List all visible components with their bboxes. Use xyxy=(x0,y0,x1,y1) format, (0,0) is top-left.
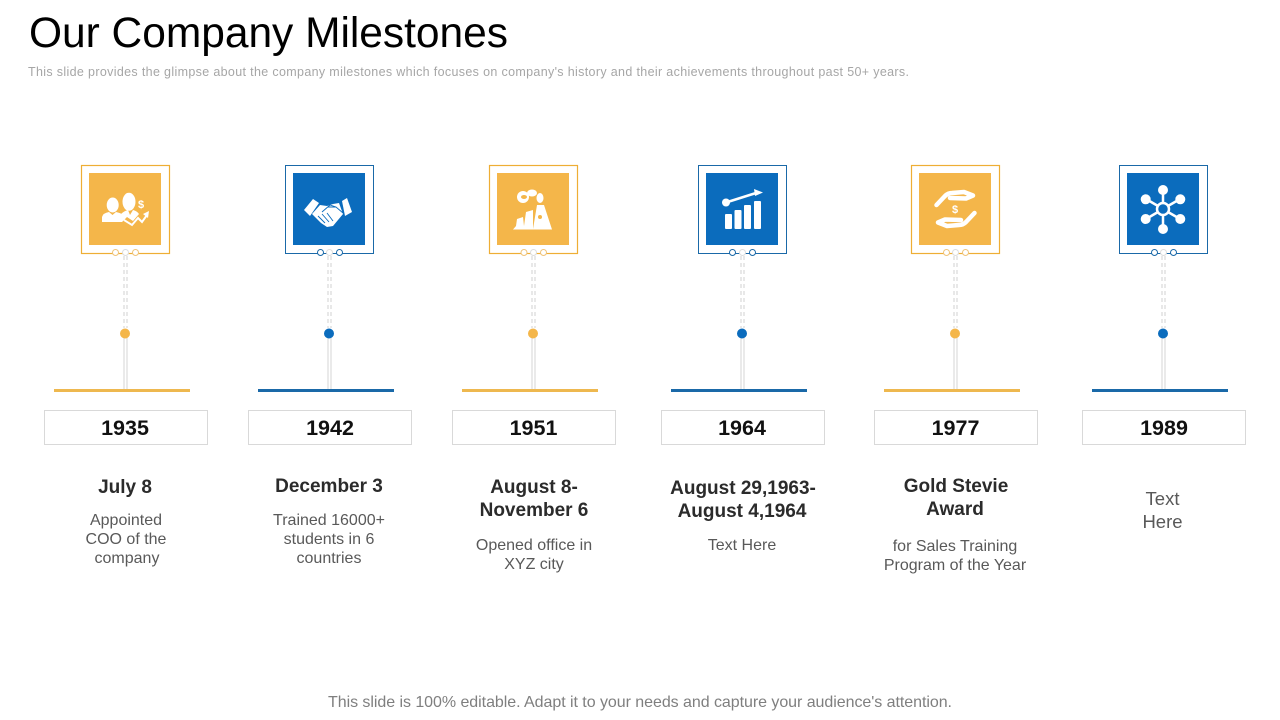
milestone 1942 xyxy=(248,166,412,567)
connector xyxy=(112,250,138,390)
description: Award xyxy=(926,499,984,520)
description: COO of the xyxy=(86,531,167,548)
base bar xyxy=(671,389,807,392)
icon box: network hub xyxy=(1120,166,1208,254)
base bar xyxy=(54,389,190,392)
milestone 1951 xyxy=(452,166,616,573)
milestone 1935 xyxy=(44,166,208,567)
year box: 1989 xyxy=(1140,416,1188,440)
description: August 4,1964 xyxy=(678,501,807,522)
year box xyxy=(452,410,616,444)
description xyxy=(884,476,1027,574)
connector xyxy=(1152,250,1176,390)
icon box: hands and dollar xyxy=(912,166,1000,254)
footer note: This slide is 100% editable. Adapt it to your needs and capture your audience's attention. xyxy=(328,694,952,711)
icon box: people and growth xyxy=(82,166,170,254)
connector xyxy=(730,250,756,390)
description: December 3 xyxy=(275,476,383,497)
base bar xyxy=(462,389,598,392)
milestone 1964 xyxy=(662,166,824,554)
description: July 8 xyxy=(98,477,152,498)
year box: 1964 xyxy=(718,416,766,440)
year box: 1935 xyxy=(101,416,149,440)
description: countries xyxy=(297,550,361,567)
title: Our Company Milestones xyxy=(29,10,508,57)
year box: 1977 xyxy=(932,416,979,440)
year box xyxy=(44,410,208,444)
description: Program of the Year xyxy=(884,557,1027,574)
description: XYZ city xyxy=(504,556,564,573)
description: Gold Stevie xyxy=(904,476,1008,497)
year box: 1942 xyxy=(306,416,354,440)
icon box: hands and dollar: $ xyxy=(952,204,958,216)
icon box: handshake xyxy=(286,166,374,254)
description: Text xyxy=(1146,488,1179,509)
base bar xyxy=(1092,389,1228,392)
icon box: factory xyxy=(490,166,578,254)
base bar xyxy=(884,389,1020,392)
icon box: people and growth: $ xyxy=(138,199,144,211)
description: Appointed xyxy=(90,512,162,529)
description xyxy=(86,477,167,567)
description: November 6 xyxy=(480,500,588,521)
milestone 1989 xyxy=(1082,166,1246,532)
icon box: rising bar chart xyxy=(698,166,786,254)
base bar xyxy=(258,389,394,392)
description xyxy=(273,476,385,567)
description xyxy=(1142,488,1183,532)
description: students in 6 xyxy=(284,531,374,548)
subtitle: This slide provides the glimpse about the company milestones which focuses on company's history and their achievements throughout past 50+ years. xyxy=(28,65,909,79)
milestone 1977 xyxy=(874,166,1038,574)
description: Opened office in xyxy=(476,537,592,554)
year box xyxy=(248,410,412,444)
description: Here xyxy=(1142,511,1183,532)
description: August 29,1963- xyxy=(670,478,816,499)
description: August 8- xyxy=(490,477,578,498)
connector xyxy=(521,250,546,390)
connector xyxy=(944,250,968,390)
description xyxy=(670,478,816,554)
description: Text Here xyxy=(708,537,776,554)
description xyxy=(476,477,592,573)
year box xyxy=(874,410,1038,444)
year box xyxy=(662,410,824,444)
description: company xyxy=(95,550,159,567)
description: for Sales Training xyxy=(893,538,1017,555)
connector xyxy=(318,250,342,390)
description: Trained 16000+ xyxy=(273,512,385,529)
year box xyxy=(1082,410,1246,444)
year box: 1951 xyxy=(510,416,557,440)
